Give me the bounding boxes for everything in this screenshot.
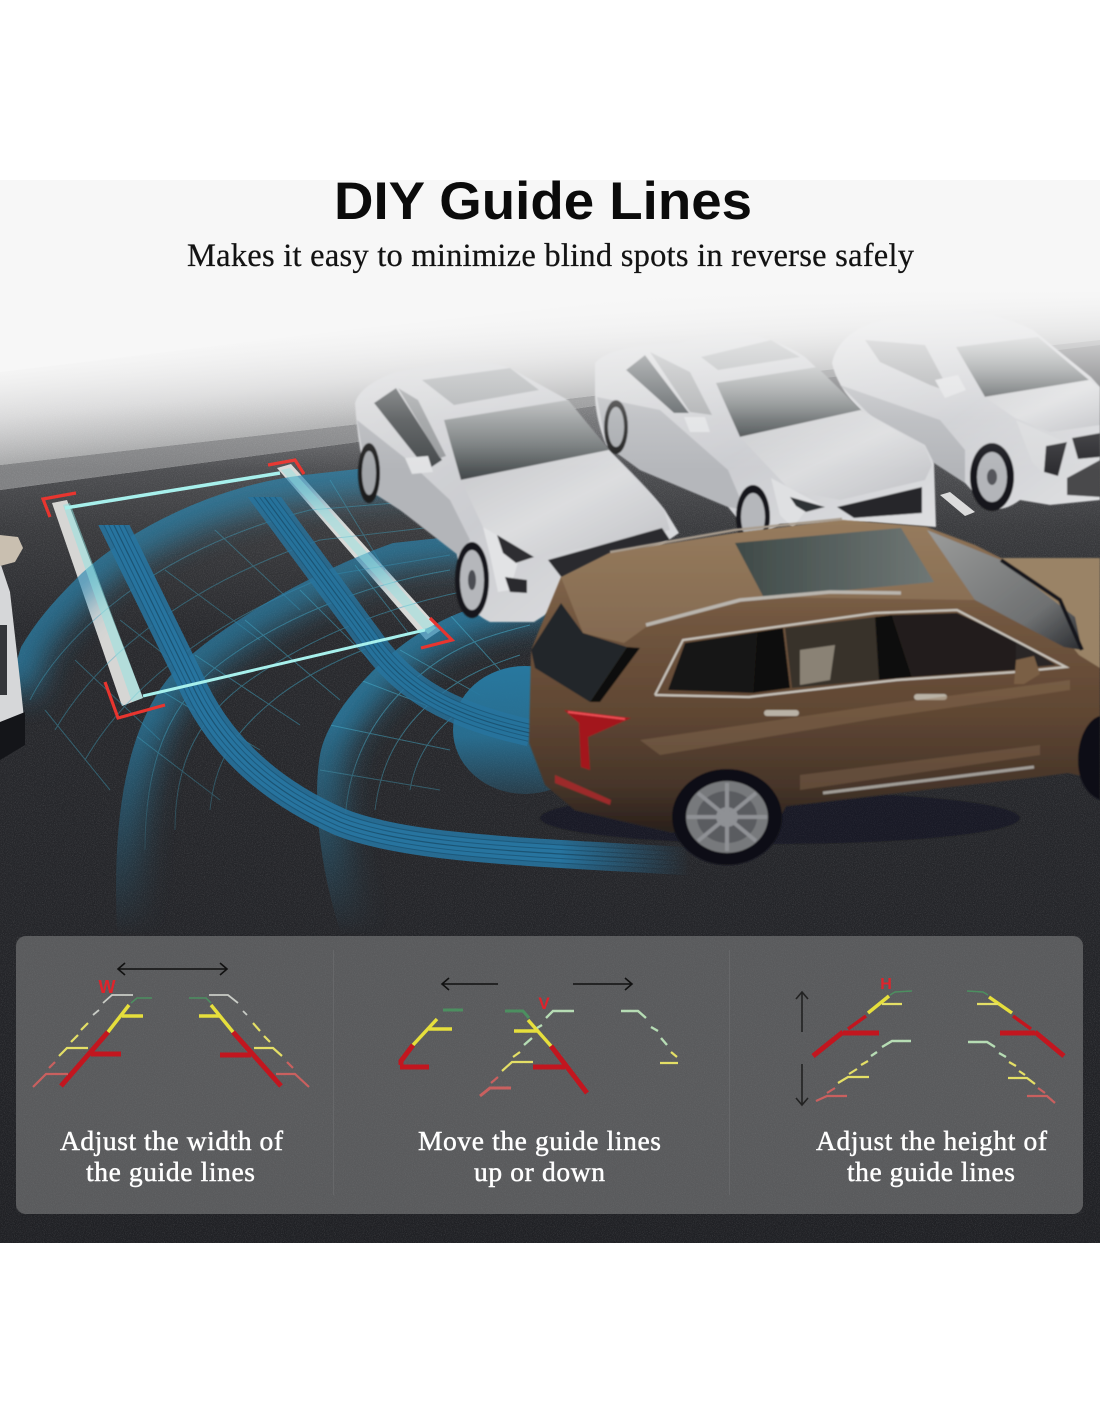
infographic canvas <box>0 180 1100 1243</box>
left arrow <box>442 978 498 990</box>
parking bay stripes <box>52 464 975 706</box>
width caption <box>60 1125 284 1187</box>
height adjustment group <box>796 976 1064 1187</box>
rear reflector <box>555 775 611 805</box>
width guide lines <box>33 995 309 1087</box>
chrome sill <box>823 767 1034 793</box>
arc 3 <box>317 612 546 916</box>
front wheel <box>672 769 782 865</box>
door handles <box>764 710 799 716</box>
concrete wall <box>0 292 1100 465</box>
down arrow <box>796 1064 808 1105</box>
arc 2 <box>116 538 458 914</box>
side windows <box>668 632 757 693</box>
red corner brackets <box>43 460 452 718</box>
tyre track band left <box>109 515 700 862</box>
title: DIY Guide Lines <box>334 172 752 231</box>
move caption <box>418 1125 661 1187</box>
roof panel <box>561 520 975 643</box>
arc 1 <box>18 469 450 790</box>
far wheel <box>1078 716 1100 800</box>
up arrow <box>796 992 808 1032</box>
silver SUV far right <box>832 312 1100 511</box>
right arrow <box>573 978 632 990</box>
sonar arcs <box>18 469 551 916</box>
adjustment panel <box>16 936 1083 1214</box>
tail light <box>564 710 631 770</box>
scene background <box>0 180 1100 1243</box>
width caption: the guide lines <box>86 1156 255 1187</box>
move caption: up or down <box>474 1156 605 1187</box>
H label: H <box>880 976 892 993</box>
W label: W <box>98 977 116 997</box>
chrome window trim <box>655 610 1066 697</box>
fog overlay <box>0 290 1100 470</box>
parking box overlay <box>43 460 452 718</box>
white car at left edge <box>0 535 25 760</box>
width double arrow <box>118 963 227 975</box>
width caption: Adjust the width of <box>60 1125 284 1156</box>
asphalt ground <box>0 345 1100 1243</box>
height guide lines <box>813 991 1064 1103</box>
silver sedan left <box>355 362 679 622</box>
panoramic roof <box>735 528 934 598</box>
move adjustment group <box>400 978 678 1187</box>
hood <box>1001 558 1100 668</box>
roof rail <box>646 592 901 625</box>
rear glass <box>531 603 627 702</box>
asphalt texture <box>0 400 1100 1243</box>
silver sedan centre <box>595 333 936 549</box>
arc 4 dome <box>453 666 597 794</box>
height caption <box>816 1125 1048 1187</box>
height caption: the guide lines <box>847 1156 1015 1187</box>
windshield <box>927 530 1082 650</box>
width adjustment group <box>33 963 309 1187</box>
move guide lines <box>400 1010 678 1096</box>
shoulder highlight <box>640 680 1070 755</box>
move caption: Move the guide lines <box>418 1125 661 1156</box>
V label: V <box>538 994 550 1013</box>
body shell <box>529 520 1100 835</box>
tyre track band right <box>257 487 530 733</box>
kerb <box>0 340 1100 490</box>
height caption: Adjust the height of <box>816 1125 1048 1156</box>
side mirror <box>1014 656 1040 684</box>
subtitle: Makes it easy to minimize blind spots in reverse safely <box>187 238 915 274</box>
brown SUV <box>529 519 1100 865</box>
